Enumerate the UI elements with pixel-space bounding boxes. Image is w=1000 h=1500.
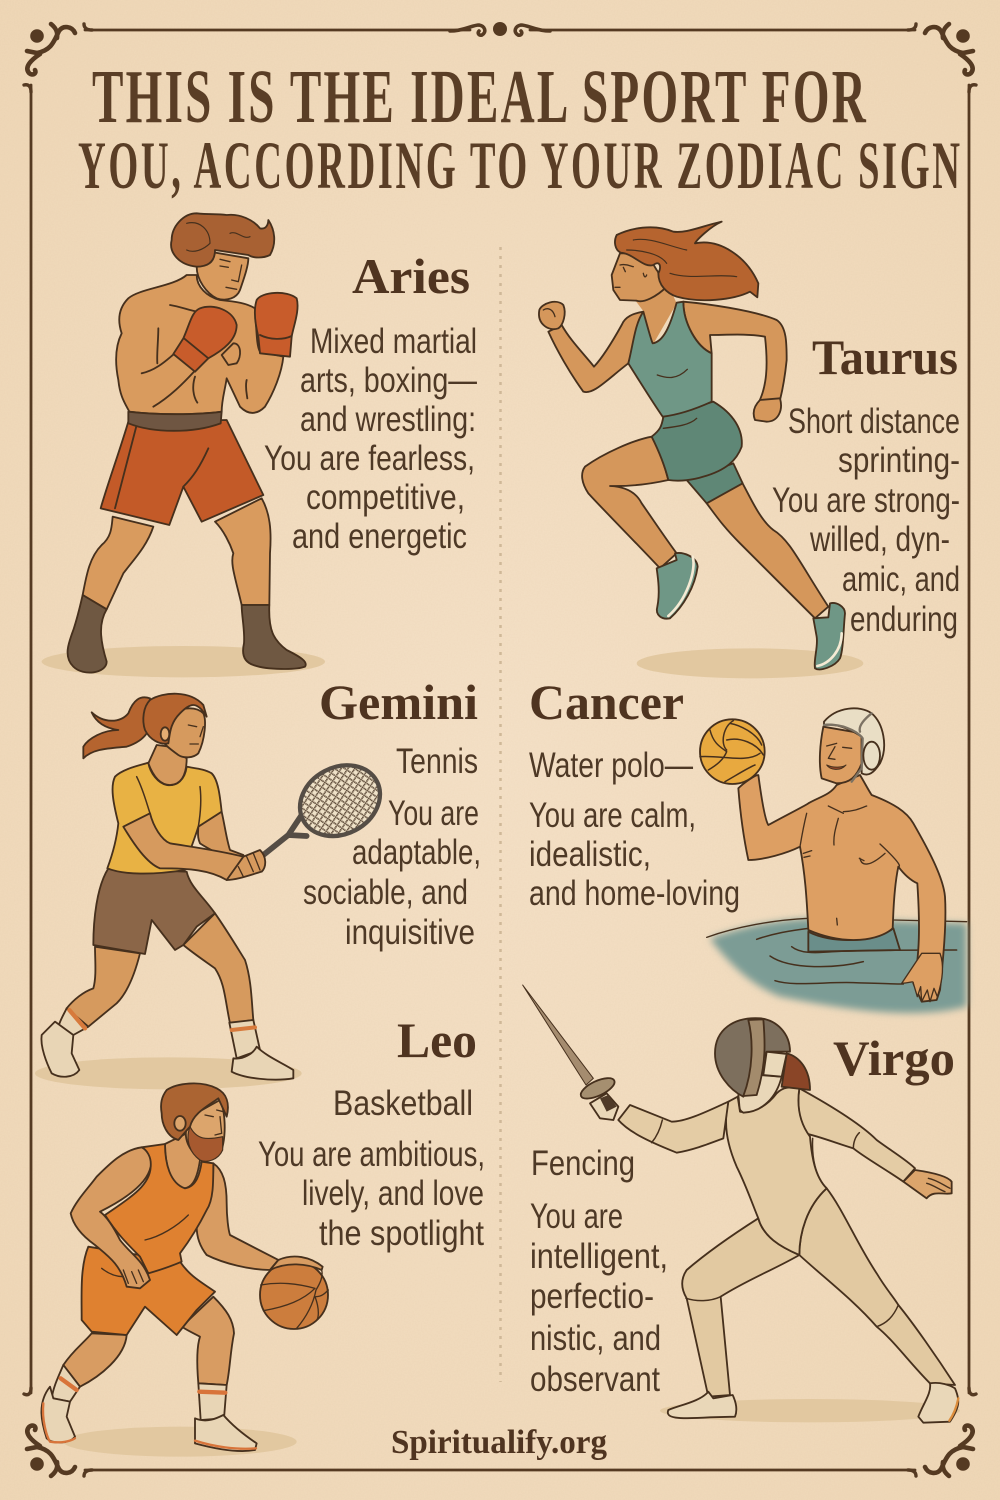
- description: Cancer: and home-loving: [529, 874, 740, 913]
- heading: Gemini: Gemini: [319, 674, 478, 730]
- description: Taurus: amic, and: [842, 560, 960, 599]
- illustration: water polo player: [700, 708, 967, 1013]
- heading: Cancer: Cancer: [529, 674, 684, 730]
- description: Cancer: [529, 746, 740, 913]
- description: Gemini: You are: [388, 794, 479, 833]
- description: Virgo: nistic, and: [530, 1319, 661, 1358]
- illustration: sprinter: [539, 222, 863, 678]
- panel: Cancer: [529, 674, 967, 1013]
- heading: Virgo: Virgo: [833, 1030, 955, 1086]
- description: Leo: the spotlight: [319, 1214, 484, 1253]
- panel: Leo: [41, 1012, 485, 1457]
- description: Taurus: [772, 402, 960, 639]
- title: [78, 55, 960, 203]
- description: Gemini: sociable, and: [303, 873, 468, 912]
- description: Aries: arts, boxing—: [300, 361, 477, 400]
- description: Aries: [264, 322, 477, 556]
- footer: website credit: Spiritualify.org: [391, 1424, 607, 1461]
- heading: Taurus: Taurus: [812, 329, 958, 385]
- panel: Virgo: [523, 985, 960, 1423]
- dotted centre divider: [499, 247, 502, 1382]
- description: Virgo: perfectio-: [530, 1277, 654, 1316]
- description: Virgo: Fencing: [531, 1144, 635, 1183]
- title: THIS IS THE IDEAL SPORT FOR: [92, 55, 867, 139]
- description: Gemini: Tennis: [396, 742, 478, 781]
- description: Virgo: [530, 1144, 668, 1399]
- title: YOU, ACCORDING TO YOUR ZODIAC SIGN: [78, 128, 960, 203]
- description: Leo: lively, and love: [302, 1174, 484, 1213]
- description: Aries: competitive,: [306, 478, 465, 517]
- description: Aries: and energetic: [292, 517, 467, 556]
- description: Gemini: adaptable,: [352, 833, 481, 872]
- illustration: basketball player: [41, 1083, 328, 1457]
- description: Leo: Basketball: [333, 1084, 473, 1123]
- description: Gemini: [303, 742, 481, 952]
- panel: Gemini: [35, 674, 481, 1089]
- description: Aries: and wrestling:: [300, 400, 476, 439]
- description: Aries: You are fearless,: [264, 439, 475, 478]
- heading: Aries: Aries: [352, 248, 470, 304]
- description: Leo: You are ambitious,: [258, 1135, 485, 1174]
- illustration: boxer: [42, 213, 325, 677]
- description: Taurus: willed, dyn-: [809, 520, 950, 559]
- description: Cancer: You are calm,: [529, 796, 696, 835]
- description: Leo: [258, 1084, 485, 1253]
- description: Cancer: Water polo—: [529, 746, 693, 785]
- heading: Leo: Leo: [397, 1012, 477, 1068]
- description: Virgo: intelligent,: [530, 1237, 668, 1276]
- illustration: tennis player: [35, 694, 392, 1089]
- description: Cancer: idealistic,: [529, 835, 651, 874]
- description: Gemini: inquisitive: [345, 913, 475, 952]
- description: Taurus: enduring: [850, 600, 958, 639]
- panel: Taurus: [539, 222, 960, 678]
- description: Taurus: sprinting-: [838, 441, 960, 480]
- description: Virgo: You are: [530, 1197, 623, 1236]
- panel: Aries: [42, 213, 477, 677]
- illustration: fencer: [523, 985, 960, 1423]
- description: Aries: Mixed martial: [310, 322, 477, 361]
- description: Virgo: observant: [530, 1360, 660, 1399]
